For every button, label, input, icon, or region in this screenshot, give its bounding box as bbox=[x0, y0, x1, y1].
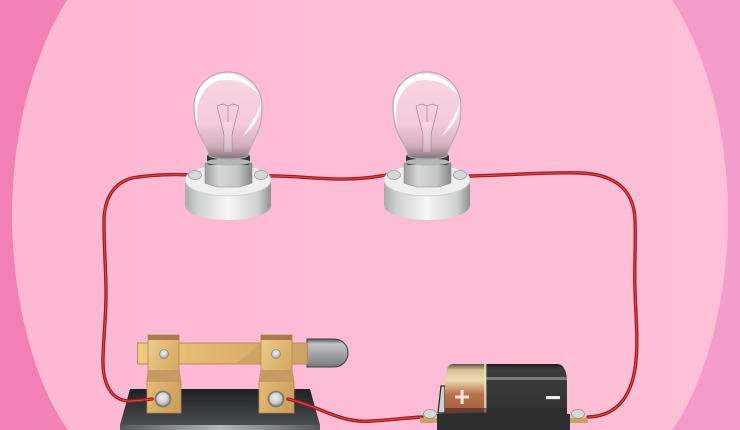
holder bbox=[437, 412, 570, 430]
minus sign: − bbox=[545, 382, 561, 413]
terminals bbox=[420, 418, 438, 423]
cell black bbox=[486, 364, 567, 414]
left clamp bbox=[147, 335, 181, 413]
clip bbox=[438, 386, 445, 413]
battery bbox=[420, 364, 588, 430]
handle bbox=[307, 339, 348, 367]
cell copper bbox=[445, 364, 486, 414]
switch base plate bbox=[120, 389, 320, 430]
knife switch bbox=[120, 335, 348, 430]
plus sign: + bbox=[454, 381, 470, 412]
right clamp bbox=[259, 335, 294, 413]
wires bbox=[103, 173, 637, 421]
blade bbox=[138, 343, 308, 364]
bulb right bbox=[384, 72, 470, 220]
bulb left bbox=[185, 72, 271, 220]
